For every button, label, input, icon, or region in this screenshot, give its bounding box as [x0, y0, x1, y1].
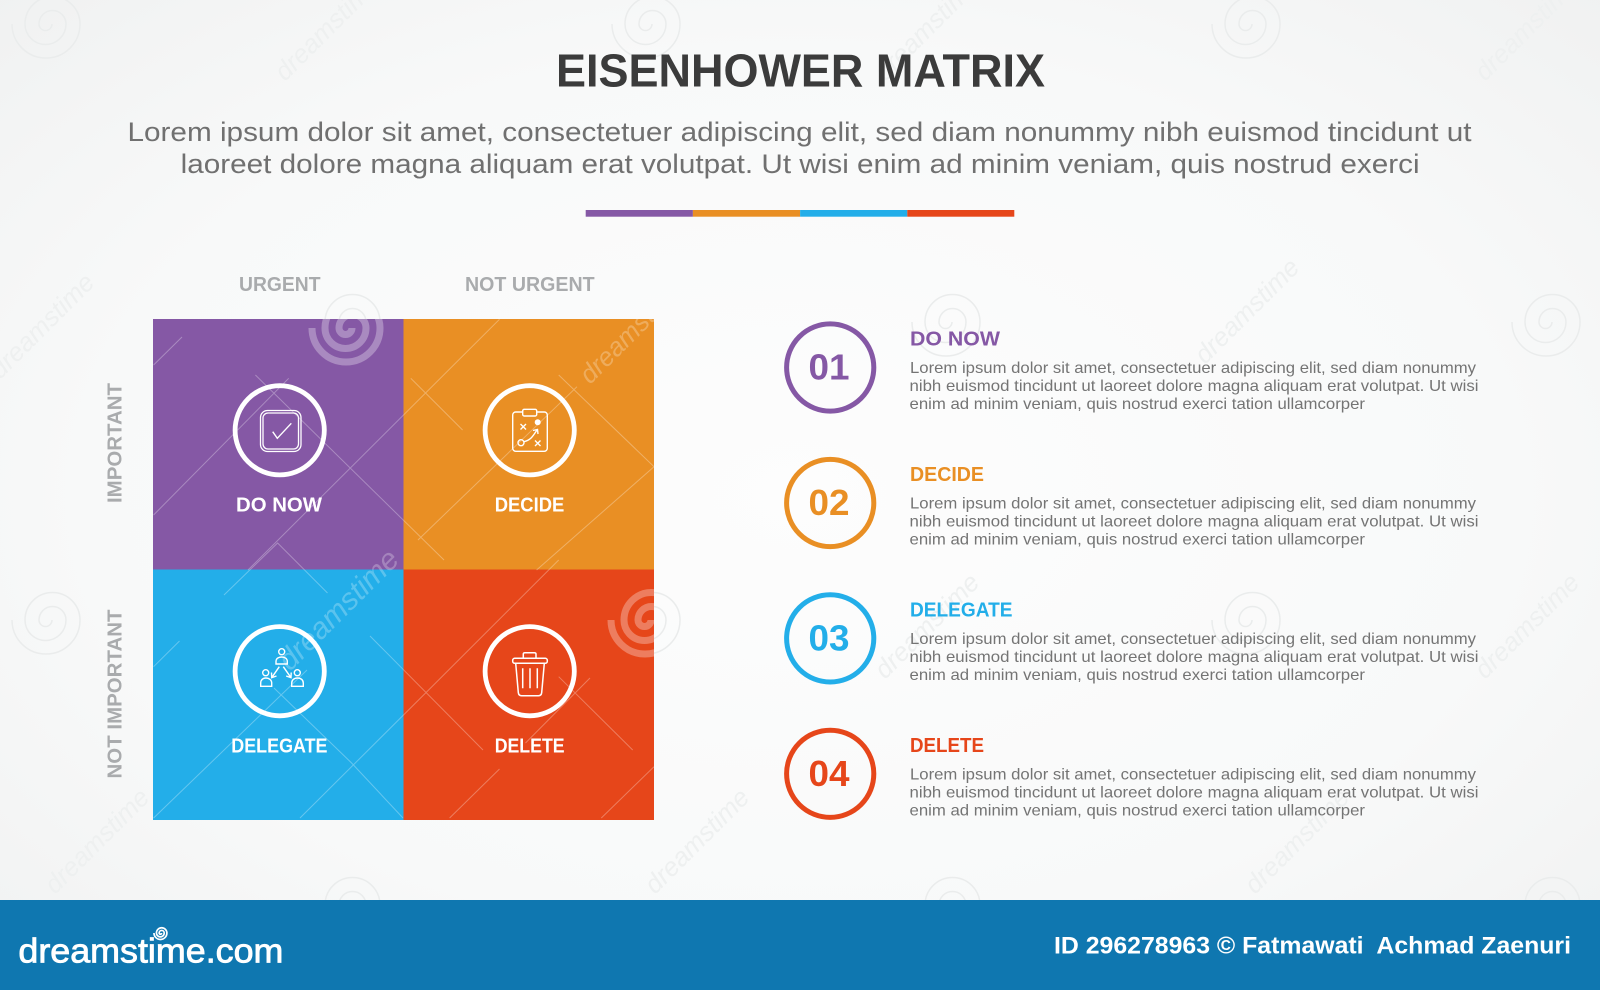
- description: do now: enim ad minim veniam, quis nostrud exerci tation ullamcorper: [910, 396, 1366, 413]
- quadrant background: do now: [153, 319, 404, 570]
- text: dreamstime: [38, 782, 155, 899]
- description: delete: nibh euismod tincidunt ut laoreet dolore magna aliquam erat volutpat. Ut wisi: [910, 784, 1478, 801]
- row headings: NOT IMPORTANT: [104, 609, 126, 778]
- description: delete: [910, 766, 1478, 819]
- number badge 02: 02: [808, 482, 850, 523]
- quadrant background: delete: [404, 570, 654, 820]
- heading: delegate: DELEGATE: [910, 599, 1012, 621]
- column headings: URGENT: [239, 273, 321, 296]
- description: decide: Lorem ipsum dolor sit amet, consectetuer adipiscing elit, sed diam nonummy: [910, 496, 1476, 512]
- column headings: [239, 273, 595, 296]
- title: EISENHOWER MATRIX: [556, 44, 1045, 96]
- list item 04: delete: [787, 730, 1478, 819]
- description: delete: enim ad minim veniam, quis nostrud exerci tation ullamcorper: [910, 802, 1366, 819]
- description: decide: [910, 496, 1478, 548]
- quadrant background: decide: [404, 319, 654, 570]
- footer band: [0, 900, 1600, 990]
- heading: do now: DO NOW: [910, 328, 1000, 350]
- label: do now: DO NOW: [236, 494, 323, 517]
- label: delete: DELETE: [495, 734, 565, 757]
- description: do now: nibh euismod tincidunt ut laoreet dolore magna aliquam erat volutpat. Ut wisi: [910, 378, 1478, 395]
- subtitle text block: Lorem ipsum dolor sit amet, consectetuer adipiscing elit, sed diam nonummy nibh euismod tincidunt ut: [128, 117, 1472, 147]
- description: do now: [910, 360, 1478, 413]
- description: decide: enim ad minim veniam, quis nostrud exerci tation ullamcorper: [910, 532, 1366, 548]
- subtitle text block: laoreet dolore magna aliquam erat volutpat. Ut wisi enim ad minim veniam, quis nostrud exerci: [181, 149, 1420, 179]
- icon: delegate people: [235, 627, 324, 716]
- description: do now: Lorem ipsum dolor sit amet, consectetuer adipiscing elit, sed diam nonummy: [910, 360, 1476, 377]
- number badge 03: [787, 595, 874, 682]
- heading: decide: DECIDE: [910, 464, 984, 486]
- icon: delete trash can: [485, 627, 574, 716]
- text: dreamstime: [868, 567, 985, 684]
- list item 01: do now: [787, 324, 1478, 413]
- row headings: IMPORTANT: [104, 383, 126, 503]
- number badge 04: 04: [808, 753, 850, 794]
- heading: delete: DELETE: [910, 735, 984, 757]
- label: decide: DECIDE: [495, 494, 564, 517]
- number badge 01: [787, 324, 874, 411]
- description: decide: nibh euismod tincidunt ut laoreet dolore magna aliquam erat volutpat. Ut wisi: [910, 514, 1478, 530]
- text: dreamstime: [1468, 567, 1585, 684]
- description: delegate: nibh euismod tincidunt ut laoreet dolore magna aliquam erat volutpat. Ut wisi: [910, 649, 1478, 666]
- text: dreamstime: [1238, 782, 1355, 899]
- panel: matrix: [153, 319, 654, 820]
- icon: decide clipboard: [485, 386, 574, 475]
- icon: do now check box: [235, 386, 324, 475]
- text: dreamstime: [638, 782, 755, 899]
- label: delegate: DELEGATE: [231, 734, 328, 757]
- text: dreamstime: [1188, 252, 1305, 369]
- description: delegate: [910, 631, 1478, 684]
- list item 03: delegate: [787, 595, 1478, 684]
- number badge 01: 01: [808, 346, 850, 388]
- image id and credit: ID 296278963 © Fatmawati Achmad Zaenuri: [1054, 932, 1571, 960]
- number badge 02: [787, 459, 874, 547]
- quadrant background: delegate: [153, 570, 404, 820]
- panel: matrix: dreamstime: [573, 272, 690, 389]
- number badge 04: [787, 730, 874, 817]
- description: delegate: Lorem ipsum dolor sit amet, consectetuer adipiscing elit, sed diam nonummy: [910, 631, 1476, 648]
- description: delete: Lorem ipsum dolor sit amet, consectetuer adipiscing elit, sed diam nonummy: [910, 766, 1476, 783]
- list item 02: decide: [787, 459, 1478, 548]
- column headings: NOT URGENT: [465, 273, 595, 296]
- row headings: [104, 383, 126, 778]
- number badge 03: 03: [808, 617, 850, 658]
- four-colour divider bar: [586, 210, 1014, 217]
- subtitle text block: [128, 117, 1472, 179]
- description: delegate: enim ad minim veniam, quis nostrud exerci tation ullamcorper: [910, 667, 1366, 684]
- dreamstime logo: dreamstime.com: [18, 933, 283, 971]
- panel: matrix: dreamstime: [272, 543, 406, 677]
